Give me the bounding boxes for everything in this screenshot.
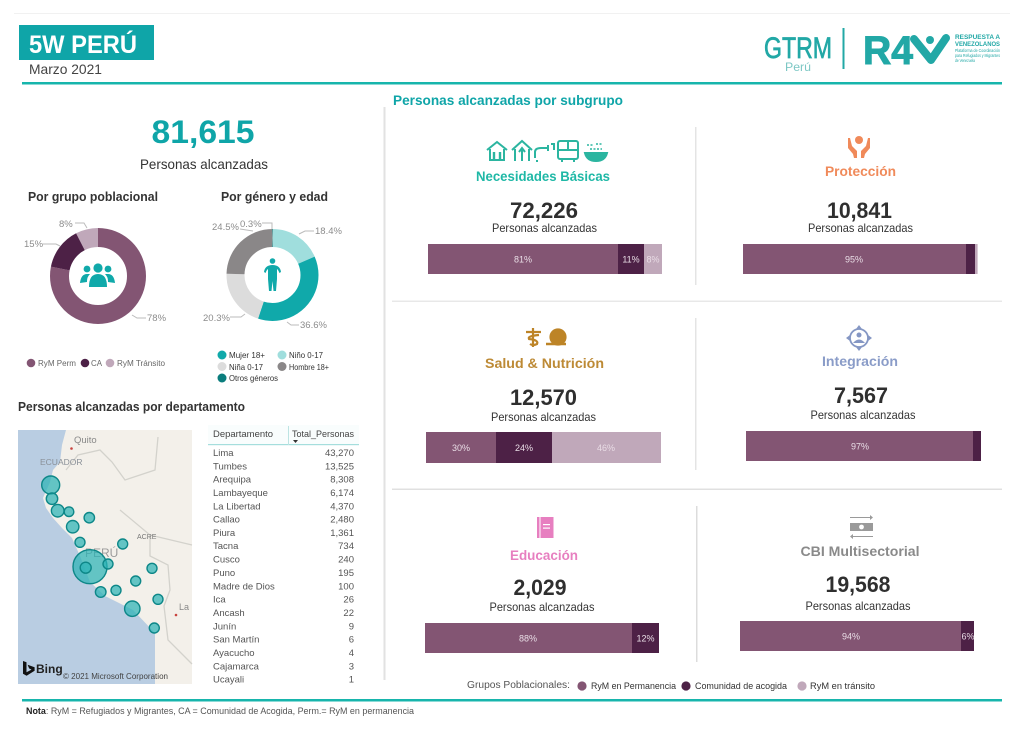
stacked bar	[428, 244, 662, 274]
panel: por género y edad	[203, 190, 342, 383]
stacked bar	[426, 432, 661, 463]
stacked bar: 88%	[519, 634, 537, 644]
table rows: San Martín	[213, 635, 259, 646]
Bing attribution	[23, 661, 168, 681]
footnote: Nota: RyM = Refugiados y Migrantes, CA = Comunidad de Acogida, Perm.= RyM en permanencia	[26, 706, 415, 717]
value: 7,567: 7,567	[834, 383, 888, 408]
stacked bar: 24%	[515, 443, 533, 453]
legend: grupo poblacional: CA	[91, 358, 102, 368]
legend: género y edad: Otros géneros	[229, 373, 278, 383]
caption: Personas alcanzadas	[490, 600, 594, 614]
heading: CBI multisectorial: CBI Multisectorial	[800, 544, 920, 559]
panel: salud y nutrición	[426, 328, 661, 463]
table header: Total_Personas	[292, 429, 354, 440]
table rows: Piura	[213, 528, 236, 539]
panel: CBI multisectorial	[740, 515, 975, 651]
legend: grupos poblacionales: RyM en Permanencia	[591, 681, 676, 691]
header title block: 5W PERÚ	[29, 29, 137, 59]
legend: género y edad: Niña 0-17	[229, 362, 263, 372]
icon: integration circle	[846, 325, 872, 351]
table: personas por departamento	[208, 425, 359, 686]
map: bubble map of Peru	[18, 430, 192, 684]
table rows: 22	[343, 608, 354, 619]
logos GTRM Peru and R4V: Plataforma de Coordinación	[955, 48, 1000, 53]
table rows: Lambayeque	[213, 488, 268, 499]
icon: person	[264, 258, 281, 291]
data labels: género y edad: 20.3%	[203, 313, 230, 324]
table rows: 6	[349, 635, 354, 646]
logos GTRM Peru and R4V: de Venezuela	[955, 58, 975, 63]
heading: necesidades básicas: Necesidades Básicas	[476, 169, 610, 184]
logos GTRM Peru and R4V: R4	[863, 29, 914, 73]
legend: grupos poblacionales: RyM en tránsito	[810, 681, 875, 691]
caption: Personas alcanzadas	[810, 408, 916, 422]
data labels: género y edad: 24.5%	[212, 222, 239, 233]
heading: salud y nutrición: Salud & Nutrición	[485, 356, 604, 371]
legend: género y edad: Mujer 18+	[229, 350, 265, 360]
table rows: 195	[338, 568, 354, 579]
stacked bar: 81%	[514, 254, 532, 264]
stacked bar	[746, 431, 981, 461]
table rows: 4,370	[330, 501, 354, 512]
donut chart: grupo poblacional	[60, 238, 136, 314]
caption: Personas alcanzadas	[492, 221, 597, 235]
data labels: grupo poblacional: 78%	[147, 313, 167, 324]
stacked bar: 46%	[597, 443, 615, 453]
table rows: 4	[349, 648, 354, 659]
value: 12,570: 12,570	[510, 385, 577, 410]
icon: health and nutrition	[526, 328, 566, 347]
stacked bar	[743, 244, 978, 274]
heading: personas alcanzadas por departamento: Personas alcanzadas por departamento	[18, 400, 245, 414]
panel: integración	[746, 325, 981, 461]
panel: por grupo poblacional	[24, 190, 167, 368]
table rows: 43,270	[325, 448, 354, 459]
heading: integración: Integración	[822, 354, 898, 369]
data labels: grupo poblacional: 15%	[24, 239, 44, 250]
value: 19,568: 19,568	[826, 572, 890, 597]
table rows: 240	[338, 555, 354, 566]
table rows: 26	[343, 595, 354, 606]
legend: grupos poblacionales: Grupos Poblacionales:	[467, 680, 570, 691]
icon: cash transfer	[850, 515, 873, 539]
table rows: 100	[338, 581, 354, 592]
total KPI: Personas alcanzadas	[140, 156, 268, 172]
table rows: La Libertad	[213, 501, 261, 512]
table rows: 1	[349, 675, 354, 686]
donut chart: género y edad	[236, 238, 310, 312]
Bing attribution: © 2021 Microsoft Corporation	[63, 672, 168, 681]
data bubbles	[42, 476, 163, 633]
table rows: Ica	[213, 595, 226, 606]
value: 2,029: 2,029	[514, 575, 566, 600]
stacked bar	[425, 623, 659, 653]
legend: grupo poblacional: RyM Tránsito	[117, 358, 165, 368]
table rows: Ucayali	[213, 675, 244, 686]
logos GTRM Peru and R4V: GTRM	[764, 32, 832, 65]
map: bubble map of Peru: PERÚ	[85, 545, 118, 560]
map: bubble map of Peru: ECUADOR	[40, 457, 83, 467]
total KPI: 81,615	[152, 114, 254, 150]
table rows: 1,361	[330, 528, 354, 539]
caption: Personas alcanzadas	[806, 599, 910, 613]
heading: educación: Educación	[510, 548, 578, 563]
legend: grupos poblacionales	[467, 680, 875, 691]
data labels: grupo poblacional	[24, 219, 167, 324]
legend: género y edad: Hombre 18+	[289, 362, 329, 372]
data labels: género y edad	[203, 219, 342, 331]
stacked bar: 30%	[452, 443, 470, 453]
table rows: 9	[349, 621, 354, 632]
logos GTRM Peru and R4V: Perú	[785, 60, 811, 74]
stacked bar: 97%	[851, 442, 869, 452]
table header: Departamento	[213, 429, 273, 440]
table rows: Puno	[213, 568, 235, 579]
logos GTRM Peru and R4V: VENEZOLANOS	[955, 42, 1000, 48]
table rows: Tacna	[213, 541, 239, 552]
table rows: Ayacucho	[213, 648, 255, 659]
legend: grupos poblacionales: Comunidad de acogida	[695, 681, 787, 691]
table rows: 6,174	[330, 488, 354, 499]
data labels: grupo poblacional: 8%	[59, 219, 73, 230]
heading: protección: Protección	[825, 164, 896, 179]
header title block: Marzo 2021	[29, 61, 102, 77]
legend: grupo poblacional: RyM Perm	[38, 358, 76, 368]
panel: protección	[743, 136, 978, 274]
heading: personas alcanzadas por subgrupo: Personas alcanzadas por subgrupo	[393, 93, 623, 108]
caption: Personas alcanzadas	[808, 221, 913, 235]
stacked bar: 11%	[622, 254, 640, 264]
table rows	[213, 448, 354, 686]
stacked bar	[740, 621, 975, 651]
legend: género y edad: Niño 0-17	[289, 350, 323, 360]
logos GTRM Peru and R4V	[764, 28, 1001, 74]
panel: necesidades básicas	[428, 141, 662, 274]
table rows: 8,308	[330, 475, 354, 486]
table rows: Cajamarca	[213, 661, 260, 672]
heading: género y edad: Por género y edad	[221, 190, 328, 204]
table rows: Callao	[213, 515, 240, 526]
map: bubble map of Peru: Quito	[74, 435, 97, 446]
table rows: 734	[338, 541, 354, 552]
table rows: 3	[349, 661, 354, 672]
logos GTRM Peru and R4V: RESPUESTA A	[955, 35, 1001, 41]
stacked bar: 95%	[845, 254, 863, 264]
table rows: 2,480	[330, 515, 354, 526]
icon: notebook	[537, 517, 554, 538]
data labels: género y edad: 18.4%	[315, 226, 342, 237]
stacked bar: 12%	[636, 634, 655, 644]
stacked bar: 6%	[961, 632, 975, 642]
data labels: género y edad: 36.6%	[300, 320, 327, 331]
table header	[208, 425, 359, 445]
table rows: Madre de Dios	[213, 581, 275, 592]
heading: grupo poblacional: Por grupo poblacional	[28, 190, 158, 204]
panel: educación	[425, 517, 659, 653]
table rows: Lima	[213, 448, 234, 459]
caption: Personas alcanzadas	[491, 410, 596, 424]
table rows: Junín	[213, 621, 236, 632]
map: bubble map of Peru: ACRE	[137, 534, 157, 541]
Bing attribution: Bing	[36, 662, 63, 676]
data labels: género y edad: 0.3%	[240, 219, 262, 230]
stacked bar: 94%	[842, 632, 860, 642]
stacked bar: 8%	[646, 254, 660, 264]
legend: género y edad	[218, 350, 329, 383]
table rows: Tumbes	[213, 461, 247, 472]
icon: hands protecting	[848, 136, 870, 158]
icons: shelter, house, water tap, bus, food	[487, 141, 607, 162]
table rows: Ancash	[213, 608, 245, 619]
map: bubble map of Peru: La	[179, 602, 189, 612]
icon: people group	[80, 263, 115, 287]
legend: grupo poblacional	[27, 358, 165, 368]
total KPI	[140, 114, 268, 172]
value: 10,841: 10,841	[827, 198, 892, 223]
header title block	[19, 25, 154, 77]
table rows: Cusco	[213, 555, 240, 566]
value: 72,226: 72,226	[510, 198, 578, 223]
logos GTRM Peru and R4V: para Refugiados y Migrantes	[955, 53, 1001, 58]
table rows: Arequipa	[213, 475, 252, 486]
table rows: 13,525	[325, 461, 354, 472]
